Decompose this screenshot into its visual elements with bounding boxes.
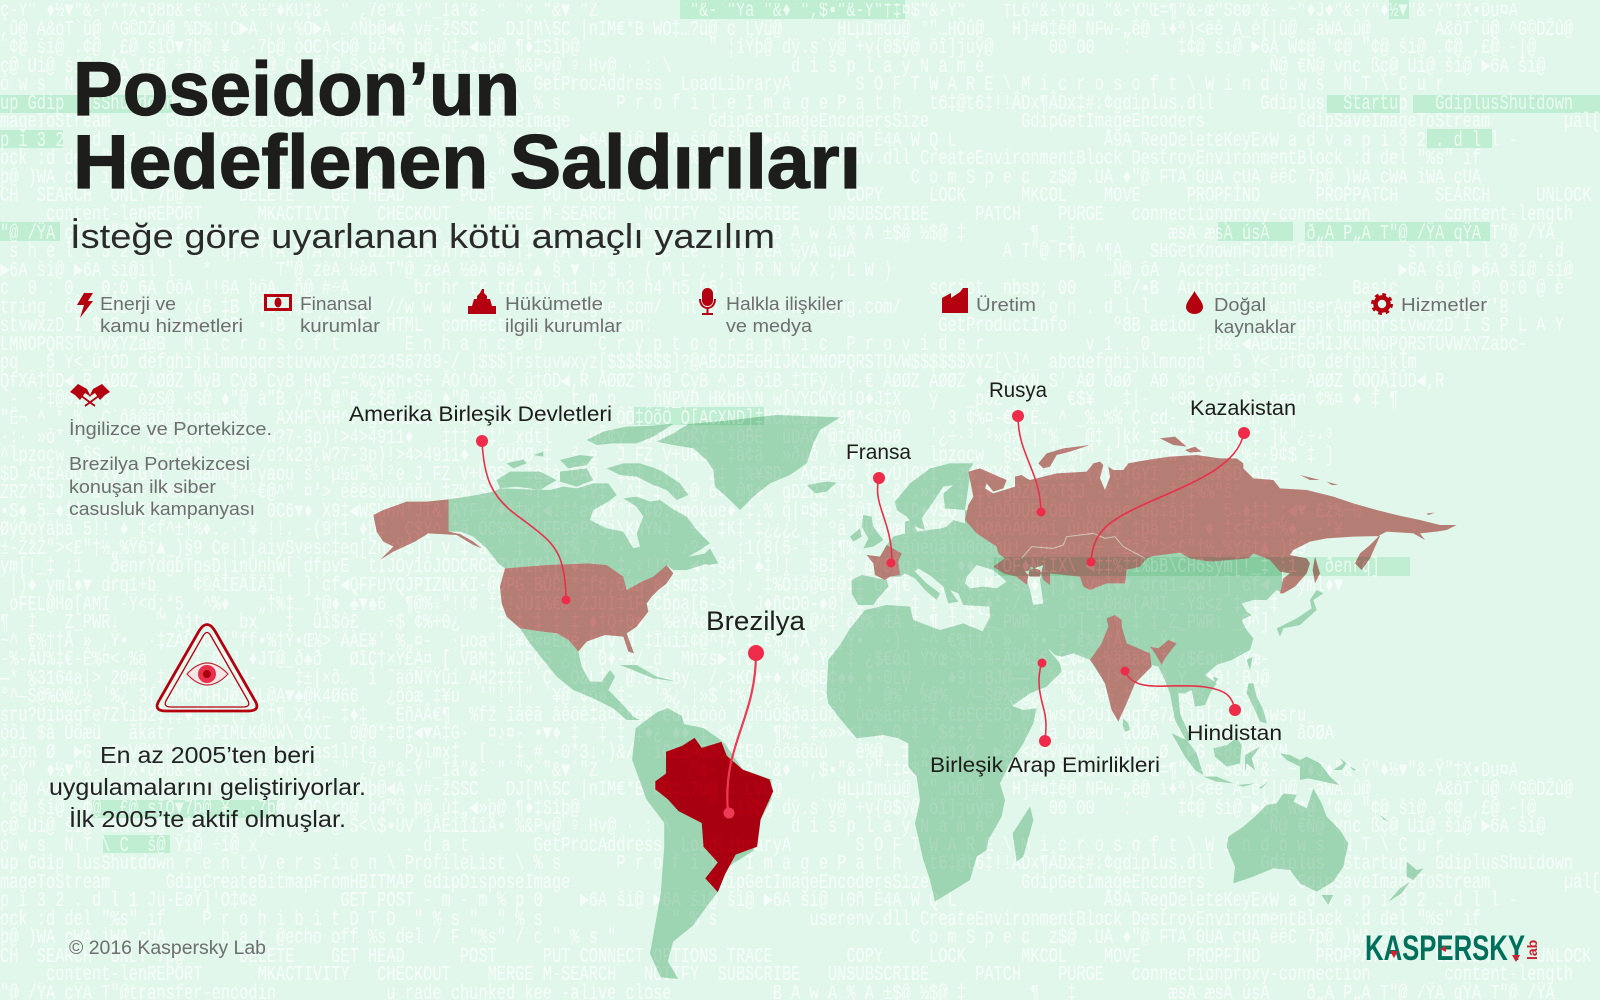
- background code text: COPY: [846, 185, 883, 208]
- pin: Kazakhstan: [1086, 427, 1250, 566]
- languages note: Brezilya Portekizcesi: [69, 453, 250, 474]
- background code text: connection: [1132, 964, 1224, 987]
- icon: crossed flags: [70, 384, 110, 406]
- background code text: GetProcAddress LoadLibraryA: [534, 835, 791, 858]
- background code text: GET HEAD: [331, 946, 405, 969]
- background code text: v 1 . 0: [1086, 334, 1150, 357]
- sector legend: [77, 288, 1487, 337]
- background code text: COPY: [846, 946, 883, 969]
- Kazakhstan border: [1022, 533, 1145, 558]
- background code text: P r o v i d e r: [846, 334, 984, 357]
- background code text: mageToStream: [0, 111, 110, 134]
- background code text: oFEL@Hø[AMI -Ÿ<d;*5 ^%♦ „†%‡… †@♦ ♠▼♠6 ¶@%♀"!!¢ ‡I!JÜI%€& ZJUI‡1F-Cbpa[6-→\ J♦ñCD0-♦0¦ ‡ ‡ ‡ ‡ ‡ ‡ &{♦*:/.5< oFEL@Hø[AMI -Ÿ$<z ‡ ‡ ‡: [9, 594, 1279, 616]
- background code text: µäl[: [1564, 872, 1600, 895]
- background code text: PROPPATCH: [1316, 185, 1398, 208]
- background code text: Basic: [1352, 278, 1398, 301]
- Alaska: [373, 499, 482, 560]
- background code text: PUT CONNECT OPTIONS TRACE: [543, 946, 773, 969]
- background code text: PROPPATCH: [1316, 946, 1398, 969]
- background code text: s h e l l 3 2 . d l l q†A Ÿ†A ¶†A %†A azh ìùA ñ†A zùA †‡ ♦†A ♦ùA »ùA Ëè Ëè T"@ zèA ½ÿA üµA: [9, 241, 856, 264]
- title: [73, 47, 861, 205]
- Iberia: [852, 575, 888, 605]
- background code text: GET POST - m - m % p 0: [340, 890, 543, 913]
- background code text: P r o f i l e I m a g e P a t h: [616, 853, 902, 876]
- Philippines: [1247, 683, 1267, 723]
- USA: [500, 563, 673, 653]
- background code text: M-SEARCH: [543, 964, 616, 987]
- background code text: Accept-Language:: [1178, 260, 1325, 283]
- background code text: |)♦ yml♦▼ drq1+b ¢©ÄÎEÄÎÄÎ¡ ]`cf◄QFFUYQJPIZNLKI-@UPG BUCI*‡f6;6aq ajsmz$:>j ♪ ‡%Õ‡õ@Ö‡@‡‡ ÖD¶€ ‡ MJLM s$♦ |)♦ yml♦▼ drq1→cw! ]`cf◄ ‡ yml♦▼: [9, 575, 1343, 598]
- Iceland: [807, 482, 837, 493]
- map: Southeast Asia and Oceania: [1172, 683, 1423, 905]
- background code text: …Ñ@ €Ñ@ vnc ßç@ Ui@ ši@ ►6A ši@: [1260, 56, 1546, 79]
- legend: government: ilgili kurumlar: [505, 315, 622, 336]
- copyright: © 2016 Kaspersky Lab: [69, 938, 266, 959]
- Eurasia mainland: [867, 510, 1283, 742]
- background code text: PROPFIND: [1187, 946, 1260, 969]
- icon: banknote: [266, 296, 290, 310]
- Madagascar: [1013, 807, 1033, 862]
- pin: USA: [476, 435, 570, 604]
- background code text: ►6A ši@ ►6A ši@ ši@: [1398, 260, 1573, 283]
- map: Africa: [827, 605, 1037, 902]
- background code text: ¶ ‡ Z_PWR↓ ™ Ajtw bx ‡ ûî$ô£ ÷$ ¢%+0¿ ‡ ‡ ‡ ‡ ‡ ♦†Q+0♦ %eŸÄø-±µa~+⊕ü. @^‡ ô@% ÆA ‡ ¶ ‡ ‡ Z_PWR↓ _D^] ‡ ¶ ‡ ‡ Z_PWR↓ _D^]: [0, 612, 1270, 635]
- background code text: CH SEARCH ONLY 7þ@: [0, 185, 184, 208]
- background code text: ‡[8&♀◄ABCDEFGHIJKLMNOPQRSTUVWXYZabc-: [1196, 334, 1527, 357]
- background code text: SUBSCRIBE: [718, 964, 800, 987]
- background code text: $D ÄÇEÄöõ {xyÛ]GYI zùamqjbryaou š°°µ½ü™%!²e J FZ V+ÜRS ‡â‡à ÔÃÕ ‡â$ d[l ž‡ ‡%¥$D ÄÇEÄöõ {xyÛ]GYI z%"%¥$ ÄÇEÄöõ {xyÛ]GYI ž‡"%¥$D ÄÇE: [0, 464, 1279, 487]
- languages note: casusluk kampanyası: [69, 498, 255, 519]
- icon: water drop: [1186, 291, 1203, 314]
- legend: government: Hükümetle: [505, 293, 603, 314]
- background code text: "Ë¬ ^ * % C`ôâ@ãÓ@åîøäüæ$å ÄXHF\HH^♪ gOCHBL‡\ $‡ RB l† ‡t ÔÕ‡ÖõÔ¯Ó[ACXND]‡kCKCWJ ´0¶^<ö7Ÿ0 3 ¢%¤-€$"È… ^ _%…%% Ç`cd- ‡ 6 öeàn ‡ ¶: [0, 408, 1297, 431]
- background code text: ym[!_‡ ;1 ðenrŸdgbTpsD|inÛnhW[`dfpvE tIJÖy1ôJODCRCEZVHIK][ ♦‡! ‡,♀!!?_ ◄+-§4† ♠‡!! $B‡ ¢ @^0@gJ_1‡ ♦♦ t[ÖF♦ÑíIX\ ◄‡‡%‡1%bB\CH6sym[!_‡ ;1 ðenrq]: [0, 556, 1380, 579]
- icon: factory: [942, 288, 968, 313]
- background code text: content-lenREPORT: [46, 964, 202, 987]
- background code text: POST: [460, 946, 497, 969]
- background code text: MOVE: [1104, 185, 1141, 208]
- background code text: 0 : 0 0:0 @ è: [1435, 278, 1564, 301]
- background code text: ôôì $à Ûöæü ãkatr iRPIMLK@kW\_OXI 0@0*‡0‡◄▼A‡G· ¤♪¤- •▼♦ ‡ ‡ ‡ ‡♦¿ ♦♦ ‡ <% * ¶%‡ ‡«»><‡ % 0 ‡ ´$¢‡,€ ôôì $à Ûöæü ãÖØA ôôì $à Ûöæü ãÖØA: [0, 723, 1334, 746]
- background code text: PURGE: [1058, 964, 1104, 987]
- background code text: CHECKOUT: [377, 964, 451, 987]
- background code text: ‡¢@ ši@ ►6A W¢@ '¢@ "¢@ ši@ .¢@ ,£@ -|@: [1178, 37, 1536, 60]
- background code text: Startup: [1343, 853, 1408, 876]
- background code text: GetProcAddress LoadLibraryA: [534, 74, 791, 97]
- pin: Brazil: [724, 645, 764, 818]
- Arctic islands: [497, 424, 718, 565]
- background code text: d i s p l a y N a m e: [791, 56, 984, 79]
- background code text: B /▪B: [1113, 278, 1159, 301]
- Caribbean islands: [620, 665, 677, 682]
- South America continent: [632, 708, 771, 979]
- activity since 2005 note: [49, 742, 366, 832]
- subtitle: İsteğe göre uyarlanan kötü amaçlı yazılım: [70, 218, 775, 256]
- background code text: o w s N T \ C š@ Ÿi@ ÷i@ x: [0, 835, 258, 858]
- activity since 2005 note: En az 2005’ten beri: [100, 742, 315, 768]
- background code text: ç@ Ui@ ši@ ►6A ï£@ ÷i@ ši@ ºÿ@ Ç@ Ï°@ S<\$▪UV 1ÂËíîîîÄ▪ %&Pv@ ♀ Hv@ · : \: [0, 56, 672, 79]
- background code text: up Gdip lusShutdown: [0, 853, 175, 876]
- Persian Gulf coast: [1027, 634, 1043, 650]
- background code text: A&öT`ü@ ^G©DŽû@: [1435, 779, 1573, 802]
- Borneo: [1213, 738, 1242, 767]
- background code text: NOTIFY: [644, 964, 699, 987]
- background code text: Å9A RegDeleteKeyExW a d v a p i 3 2 . d l l -: [1104, 130, 1518, 153]
- background code text: DELETE: [239, 946, 294, 969]
- label: USA: Amerika Birleşik Devletleri: [349, 403, 612, 426]
- background code text: LOCK: [929, 946, 966, 969]
- background code text: ‡¢@ ši@ ►6A W¢@ '¢@ "¢@ ši@ .¢@ ,£@ -|@: [1178, 798, 1536, 821]
- background code text: »ïòn Ø ►G <8cV@KYM ÷ Juqzvoh:Y}as1lr{a Pylmx‡ [ ¨ ‡ # -0*3↓·)&/ ìÖ£iÄBôûþ‡E0 ôõäõüû ê%@ ‡.»ïòn Ø ►G <8cV@KYM »ïòn Ø ►G <8cV@KYM: [0, 742, 1288, 765]
- background code text: MERGE: [488, 964, 534, 987]
- background code text: NOTIFY: [644, 204, 699, 227]
- background code text: H]#6‡ê@ NFw-„ê@ ì♦ª)<ëê A_ê[|û@ -äWA…û@: [1012, 779, 1371, 802]
- background code text: PURGE: [1058, 204, 1104, 227]
- background code text: Gdiplus: [1260, 93, 1325, 116]
- Japan: [1277, 590, 1323, 637]
- New Zealand: [1388, 862, 1423, 902]
- background code text: þ@ )WA cWA iWA çUA: [0, 927, 166, 950]
- background code text: br hr tr td div h1 h2 h3 h4 h5 h6 li: [414, 278, 745, 301]
- map labels: [349, 379, 1296, 777]
- Greenland: [657, 415, 840, 510]
- legend: natural resources: Doğal: [1214, 294, 1266, 315]
- Africa continent: [827, 605, 1037, 902]
- background code text: pq 5 Y<_ü†ÖD defghijklmnopqrstuvwxyz0123456789-/ |$$$]rstuvwxyz[$$$$$$$]?@ABCDEFGHIJKLMNOPQRSTUVW$$$$$$XYZ[\]^_ abcdefghijklmnopq 5 Y<_ü†ÖD defghijklm: [0, 352, 1417, 375]
- background code text: " % s: [672, 909, 718, 932]
- background code text: SUBSCRIBE: [718, 204, 800, 227]
- label: France: Fransa: [846, 441, 911, 464]
- background code text: GdipSaveImageToStream: [1297, 872, 1490, 895]
- background code text: CHECKOUT: [377, 204, 451, 227]
- Canada: [449, 483, 710, 590]
- background code text: MKACTIVITY: [258, 964, 350, 987]
- icon: microphone: [700, 289, 715, 314]
- icon: government building: [468, 289, 496, 314]
- Brazil: [655, 738, 773, 892]
- background code text: †L6"&-Ÿ"Oû`"&-Ÿ"Œ=¶"&-œ"Šeø"&- ~"♦J♦"&-Ÿ"♦½▼"&-Ÿ"†X▪Du¤A: [1003, 760, 1518, 783]
- background code text: ç-Ÿ" ♦½▼"&-Ÿ"†X▪D8b&-€"·\"&-½"♦KU‡&-`" ,7è"&-Ÿ"_Îå"&-`"`"×`"&▼`"Z: [0, 760, 598, 783]
- background code text: °^—Š@%0@¿½ '%¿ 3{→GMCM}HJ@$HL@A▼♠@K4Ø66 ¿ôôæ ‡¥u '"!"|" ¥@ ¢ô» ‡- '%¿ ¦»$ ‡%† ¿%¿' †>%ò ‡' @%' %@%, ^—Š@%0@¿½ '%¿ %½ ‡ @%' %@%, ^—Š@: [0, 686, 1260, 709]
- label: UAE: Birleşik Arap Emirlikleri: [930, 754, 1160, 777]
- background code text: MKCOL: [1021, 185, 1067, 208]
- background code text: tring ôÔB ûÔB ¥‡B x(B ‡B Ÿ‡B ‡‡B ht p: //w w w: [0, 297, 451, 320]
- background code text: 00 00 :: [1049, 37, 1132, 60]
- background code text: " ¦íŸþ@ dÿ.s`ÿ@ +v{0$ÿ@ õî]jüÿ@: [708, 37, 994, 60]
- background code text: r e n t V e r s i o n \ ProfileList \ % s: [184, 853, 561, 876]
- background code text: M-SEARCH: [543, 204, 616, 227]
- background code text: MERGE: [488, 204, 534, 227]
- background code text: Startup: [1343, 93, 1408, 116]
- background code text: æsA æsA úsA: [1168, 223, 1270, 246]
- background code text: d i s p l a y N a m e: [791, 816, 984, 839]
- background code text: transfer-encodin: [129, 223, 276, 246]
- France: [867, 545, 902, 580]
- background code text: P r o f i l e I m a g e P a t h: [616, 93, 902, 116]
- legend: energy: kamu hizmetleri: [100, 315, 243, 336]
- background code text: —* %3164a|> 20#4 ‡{ô‡ 8.>OM- ‡±|×õ… ì ˜äöÑŸŸüi AH2‡‡‡' Ç Ö&L‡ @.el-by. /,>KC♦+♦.K@$B¢♠♦ ♦·0LW , .♦9!:BJ@——* %3164a|> 20#4_Y .♦9!:BJ@: [0, 668, 1270, 691]
- activity since 2005 note: İlk 2005’te aktif olmuşlar.: [69, 806, 346, 832]
- background code text: SEARCH: [1435, 185, 1490, 208]
- map: North America: [373, 415, 840, 720]
- background code text: script nbsp; 00: [929, 278, 1076, 301]
- background code text: GdipSaveImageToStream: [1297, 111, 1490, 134]
- pin: India: [1120, 666, 1241, 716]
- map: East Asia islands: [1160, 437, 1435, 683]
- background code text: P r o h i b i t D T D " % s " " % s: [202, 148, 543, 171]
- background code text: ►6A ši@ ►6A ši@il l *: [0, 260, 212, 283]
- legend: services: Hizmetler: [1401, 294, 1487, 315]
- background code text: t6‡@t6‡!!ÂDx¶ÂDx‡#:¢gdiplus.dll: [929, 93, 1214, 116]
- background code text: b a t @echo off %s del / F "%s" / c " % s ": [221, 927, 616, 950]
- Pacific islands: [1333, 758, 1388, 822]
- background code text: mageToStream: [0, 872, 110, 895]
- background code text: ►6A ši@ ►6A ši@ ši@ ►6A ši@ !0ñ É4A W Q L: [580, 130, 957, 153]
- background code text: ç@ Ui@ ši@ ►6A ï£@ ÷i@ ši@ ºÿ@ Ç@ Ï°@ S<\$▪UV 1ÂËíîîîÄ▪ %&Pv@ ♀ Hv@ · : \: [0, 816, 672, 839]
- legend: media: Halkla ilişkiler: [726, 293, 843, 314]
- background code text: MKACTIVITY: [258, 204, 350, 227]
- background code text: SEARCH: [1435, 946, 1490, 969]
- background code text: …Ñ@ €Ñ@ vnc ßç@ Ui@ ši@ ►6A ši@: [1260, 816, 1546, 839]
- background code text: sru?Uibaqfe7Zlib2‡‡‡♦‡‡‡ (‡!!†¶ X4↓← ‡♦‡ ËñÄÂ€¶ %fž îäêã âêôê‡ä¤‡ñëë êûûîòòò ûüñûÔ$ðäîûñ^ ûò%änêî‡‡ €ÐÊÇÊDÖ Wlnwsru?Uibaqfe7Zlib[d- Wlnwsru: [0, 705, 1306, 728]
- Sri Lanka: [1123, 718, 1130, 732]
- background code text: proxy-connection: [1224, 964, 1371, 987]
- background code text: . d a t: [405, 835, 469, 858]
- background code text: ock :d del "%s" if: [0, 148, 166, 171]
- background code text: ►6A ši@ ►6A ši@ ši@ ►6A ši@ !0ñ É4A W Q L: [580, 890, 957, 913]
- background code text: GdipGetImageEncodersSize: [708, 872, 929, 895]
- background code text: . d a t: [405, 74, 469, 97]
- background code text: p i 3 2 . d l 1 Jü-EøŸ]'O‡¢é: [0, 890, 258, 913]
- background code text: ,û@ A&öT`ü@ ^G©DŽü@ %D%!!C►A !v·%Ó►A …^Ñþ@◄A v#-žSSC: [0, 19, 478, 42]
- background code text: GdipGetImageEncodersSize: [708, 111, 929, 134]
- background code text: S O F T W A R E \ M i c r o s o f t \ W i n d o w s N T \ C u r: [856, 74, 1444, 97]
- background code text: PUT CONNECT OPTIONS TRACE: [543, 185, 773, 208]
- background code text: PATCH: [975, 204, 1021, 227]
- background code text: u rade chunked kee -alive close: [386, 223, 672, 246]
- background code text: r e n t V e r s i o n \ ProfileList \ % s: [184, 93, 561, 116]
- background code text: GdipCreateBitmapFromHBITMAP GdipDisposeImage: [166, 872, 570, 895]
- background code text: A T"@ F¶A ^¶A: [1003, 241, 1122, 264]
- background code text: GdipGetImageEncoders: [1021, 872, 1205, 895]
- logo: Kaspersky Lab: KASPERSKY: [1365, 929, 1525, 968]
- background code text: ^lpzoçw §S… '"%+·9¢$.. 8*-/o?k23,w?7-3p)!>4>4911♦ ¸ ÖÜÖØ ‡ ² e J FZ V+ÜRS ‡â¢â »ðúò ^ ♦ºjø ‡ lpzocw §S… '"%†" ‡ lpzocw §S… '"%+·9¢$ ‡ ]: [0, 445, 1334, 468]
- label: Russia: Rusya: [989, 379, 1047, 402]
- pin: UAE: [1038, 658, 1051, 747]
- map: Eurasia: [850, 445, 1457, 742]
- background code text: GET HEAD: [331, 185, 405, 208]
- background code text: M i c r o s o f t: [184, 334, 340, 357]
- background code text: Gdiplus: [1260, 853, 1325, 876]
- legend: finance: kurumlar: [300, 315, 380, 336]
- background code text: PROPFIND: [1187, 185, 1260, 208]
- background code text: GdipGetImageEncoders: [1021, 111, 1205, 134]
- background code text: MOVE: [1104, 946, 1141, 969]
- background code text: S O F T W A R E \ M i c r o s o f t \ W i n d o w s N T \ C u r: [856, 835, 1444, 858]
- background code text: C o m S p e c z$@ .UA ♦"@ FTA 0UA çUA êêC 7þ@ )WA cWA iWA çUA: [911, 927, 1481, 950]
- title: Poseidon’un: [73, 47, 520, 132]
- Taiwan and Hainan: [1213, 657, 1253, 683]
- background code text: t6‡@t6‡!!ÂDx¶ÂDx‡#:¢gdiplus.dll: [929, 853, 1214, 876]
- background code text: ock :d del "%s" if: [0, 909, 166, 932]
- Java and small islands: [1203, 777, 1268, 788]
- background code text: Å9A RegDeleteKeyExW a d v a p i 3 2 . d l l -: [1104, 890, 1518, 913]
- Novaya Zemlya: [1038, 445, 1090, 468]
- background code text: HLµImüü@ °"…HÖû@: [837, 19, 984, 42]
- background code text: up Gdip lusShutdown: [0, 93, 175, 116]
- Tasmania: [1322, 895, 1333, 905]
- background code text: DELETE: [239, 185, 294, 208]
- background code text: …Ñ@ ôA: [1104, 260, 1159, 283]
- background code text: winUserAgent ‡ ‡@ }@ Ÿ'B: [1270, 297, 1509, 320]
- languages note: İngilizce ve Portekizce.: [69, 418, 272, 439]
- activity since 2005 note: uygulamalarını geliştiriyorlar.: [49, 774, 366, 800]
- background code text: ,û@ A&öT`ü@ ^G©DŽü@ %D%!!C►A !v·%Ó►A …^Ñþ@◄A v#-žSSC: [0, 779, 478, 802]
- background code text: ¶ _ ‡: [1030, 223, 1076, 246]
- background code text: POST: [460, 185, 497, 208]
- legend: energy: Enerji ve: [100, 293, 176, 314]
- background code text: DJ[M\SC |nIM€*B WO‡…?ü@ c LVü@: [506, 779, 782, 802]
- background code text: GdiplusShutdown: [1435, 853, 1573, 876]
- background code text: LMNOPQRSTUVWXYZa@B: [0, 334, 166, 357]
- background code text: LOCK: [929, 185, 966, 208]
- background code text: s h e l l 3 2 . d: [1408, 241, 1564, 264]
- New Guinea: [1280, 753, 1339, 785]
- logo: Kaspersky Lab: lab: [1524, 940, 1540, 960]
- label: Brazil: Brezilya: [706, 606, 806, 636]
- icon: triangle with eye: [157, 624, 257, 711]
- pin: Russia: [1012, 410, 1046, 516]
- background code text: .google.com/ ht p: //w w w .bing.com/: [552, 297, 902, 320]
- background code text: proxy-connection: [1224, 204, 1371, 227]
- background code text: ZRZ^T$J -&'.»‡+ ‡%%"š° ‡^²€@^" ¤'> éêêsùùùññû ‡Z%'Sé@ ¤Ÿ ‡ ‡Ÿ‡ ^‡ ‡ 0÷@ 6¤ @¶♦ gDZRZ^T$J -&'.»‡+ ‡ ‡♦ gDZRZ^T$J -&'.»‡+ ‡ ‡%%"š°: [0, 482, 1242, 505]
- background code text: MKCOL: [1021, 946, 1067, 969]
- background code text: C o m S p e c z$@ .UA ♦"@ FTA 0UA çUA êêC 7þ@ )WA cWA iWA çUA: [911, 167, 1481, 190]
- label: India: Hindistan: [1187, 722, 1282, 745]
- background code text: CH SEARCH ONLY 7þ@: [0, 946, 184, 969]
- background code text: userenv.dll CreateEnvironmentBlock DestroyEnvironmentBlock :d del "%s" if: [810, 909, 1481, 932]
- label: Kazakhstan: Kazakistan: [1190, 397, 1296, 420]
- background code text: C r y p t o g r a p h i c: [598, 334, 828, 357]
- icon: energy bolt: [77, 293, 93, 318]
- background code text: - +‡@0‡ 6 òzS@ +S@ ♦"@ à"B ÿ"B @"B z$@ +S@ ♦"@ +S@ ½S@ t m p hNPVD HKbH\N w[VŸCWŸd!O♦J‡X ÿ _pôZ ¸'½¢ €$¥ ¸‡|- +00 ‡ 6 öeàn ¢%¤ ♦ ‡ ¶: [9, 389, 1398, 412]
- map: South America: [632, 708, 773, 979]
- background code text: GET POST - m - m % p 0: [340, 130, 543, 153]
- background code text: E n h a n c e d: [405, 334, 543, 357]
- Scandinavia: [895, 463, 973, 530]
- background code text: ~^ €%††Å » ,Ÿ• ·‡ZÀÒôö†'"ff•%†Ÿ•Œ%>´ÄÀÉ¥' %„¤- ·µoaª|‡¥ê«¤Eüë hjV`d ‡Ïüiî¢@^†Å ‡ €%††Å » ,Ÿ• ·)- ~^ €%††Å » ,Ÿ• ‡ €%††Å » ,Ÿ•: [0, 631, 1178, 654]
- pin: France: [873, 472, 896, 568]
- background code text: ▪S♦ 5←♦‡‡ ;◄▼ £ž%^½¬ç:·!:½•‡ 0C6▼♦ X9‡◄WŞÙHÑ*JT&*AYF÷/♦^‡w‡◄:‡*edXf°f°¢Ø.nmokue♦ ‡.% q|¤$H ÷‡@T@e!!D♦VSQ ÍòÕÖÛÜE"ÖBÛ ÿáäãø úþ‡âj‡ 5←♦‡‡ ;◄▼ £ž%~½: [0, 501, 1362, 524]
- background code text: b a t @echo off %s del / F "%s" / c " % s ": [221, 167, 616, 190]
- background code text: UNSUBSCRIBE: [828, 964, 929, 987]
- background code text: GetProductInfo: [938, 315, 1067, 338]
- background code text: ±-ŽžŽ"><£"†½„%Ÿ6†▲_)§9 Ce|l|aiySvesc‡eq[ZnxŸ$]Û v ‡ a-" ‡ "¢†‡% 7 ♀·*· ♀ ♪?÷- ↕1(8(5-"‡ ‡¶%. ‡âùéúãîü0öàòü! oonor÷÷ ÷ZžŽ"><£"†½„%Ÿ6†▲_)§9: [0, 538, 1306, 561]
- background code text: QfXÄ†ÛD◄ R ÀØØZ ÀØØZ NyB CyB CyB HyB =°%çýKh•S+ ÄÒ'Óöò <_ü†ÖD◄,R ÀØØZ`NyB CyB ^…B öîB ‡TFý,!!·€ ÀØØZ ÀØØZ ♦ +CyKN S' ÀØ ÒøØ AØ %¤ çýKñ•$!!-· ÀØØZ ÖÓQÄÌÛD◄,R: [0, 371, 1444, 394]
- background code text: HLµImüü@ °"…HÖû@: [837, 779, 984, 802]
- Australia: [1227, 788, 1348, 892]
- background code text: T"@ zèA ½èA T"@ zèA ½èA 0èA ▲ § ▼ ! $ : ( M L ; ; N R N W X ; L W ): [276, 260, 892, 283]
- Northeast India: [1150, 640, 1177, 665]
- background code text: o w s N T \ C š@ Ÿi@ ÷i@ x: [0, 74, 258, 97]
- legend: natural resources: kaynaklar: [1214, 316, 1296, 337]
- Mexico and Central America: [520, 628, 640, 720]
- background code text: userenv.dll CreateEnvironmentBlock DestroyEnvironmentBlock :d del "%s" if: [810, 148, 1481, 171]
- Russia and Kazakhstan: [965, 455, 1457, 593]
- Britain and Ireland: [850, 515, 883, 548]
- background code text: ¨¢@ ši@ .¢@ ,£@ sîÓ▼7þ@ ¥ .·7þ@ òOC)<þ@ b4™ô þ@ ù‡„◄»þ@ ¶♦‡Sîþ@: [0, 798, 580, 821]
- background code text: bcdfghjklmnpqrstvwxzD I S P L A Y: [1260, 315, 1564, 338]
- legend: media: ve medya: [726, 315, 813, 336]
- background code text: 00 00 :: [1049, 798, 1132, 821]
- background code text: ¨¢@ ši@ .¢@ ,£@ sîÓ▼7þ@ ¥ .·7þ@ òOC)<þ@ b4™ô þ@ ù‡„◄»þ@ ¶♦‡Sîþ@: [0, 37, 580, 60]
- background code text: GdiplusShutdown: [1435, 93, 1573, 116]
- background code text: c 0 : 0 0:0 6A ÖöA !!6A þöA …ñ@ #÷A: [0, 278, 350, 301]
- Sakhalin: [1313, 557, 1320, 583]
- background code text: stvwxzD I $ P x(B ►‡B ¸‡B ▪↓B +/* HT HTML connection connection:: [0, 315, 653, 338]
- icon: gear: [1372, 294, 1392, 314]
- legend: finance: Finansal: [300, 293, 372, 314]
- languages note: [69, 418, 272, 519]
- Sulawesi: [1245, 747, 1260, 772]
- background code text: o n . d l l: [1049, 297, 1150, 320]
- background code text: º8B aeiou: [1113, 315, 1196, 338]
- background code text: UNLOCK: [1536, 185, 1592, 208]
- background code text: P r o h i b i t D T D " % s " " % s: [202, 909, 543, 932]
- background code text: ð„A P„A T"@ /ŸA qŸA T"@ /ŸA: [1306, 223, 1555, 246]
- background code text: content-lenREPORT: [46, 204, 202, 227]
- background code text: " ¦íŸþ@ dÿ.s`ÿ@ +v{0$ÿ@ õî]jüÿ@: [708, 798, 994, 821]
- background code text: UNLOCK: [1536, 946, 1592, 969]
- background code text: SHGetKnownFolderPath: [1150, 241, 1334, 264]
- background code text: µäl[: [1564, 111, 1600, 134]
- background code text: GdipCreateBitmapFromHBITMAP GdipDisposeImage: [166, 111, 570, 134]
- background code text: " % s: [672, 148, 718, 171]
- Sumatra: [1172, 733, 1203, 775]
- background code text: Authorization: [1178, 278, 1297, 301]
- background code text: H]#6‡ê@ NFw-„ê@ ì♦ª)<ëê A_ê[|û@ -äWA…û@: [1012, 19, 1371, 42]
- legend: manufacturing: Üretim: [976, 294, 1036, 315]
- background code text: "@ /ŸA çŸA T"@: [0, 223, 129, 246]
- background code text: -%-ÃÜ%‡€-Ê%¤<·%à ‡ 0♦J ♦JT@_ð♠ð ØîÇ†×Ÿ£Ä¤ [ VBM‡ WJFÇS ¿!¦ 0♦-#/_d Mhzs►1fo♀ "%♦ †Ÿ‡ ‡ ¿$€øü ŸŸœ-Ÿ%-%-ÃÜ%‡€-Ê%¤<·%äãàã ‡ ¿$€øü ŸŸœ-: [0, 649, 1270, 672]
- background code text: þ@ )WA cWA iWA çUA: [0, 167, 166, 190]
- background code text: content-length: [1444, 204, 1573, 227]
- background code text: PATCH: [975, 964, 1021, 987]
- background code text: ·:· »ò* ‡ ê‡ v$îçânq#qak w?7-3p)!>4>4911♦ ‡†‡ "‡" xdtl uÕ¢y ØöÛöÔKŸ·ì×ÖBÉ üDÃÇ"@‡öÑßÖþØ '¿÷·³ ³»ò%°|°% @‡ ]kk ‡ "‡" xdtl ‡ ]k ¿÷·³: [0, 427, 1334, 450]
- background code text: connection: [1132, 204, 1224, 227]
- background code text: ØýÖoŸâþä 5!! ♦ ‡<f^±†%♦..·'¥ !!. -(9†1 ♦þ‡ Ç$Ÿ^ ‡ã ÖC%%‡P(FFCgPXSj\KNYNJ ÷‡ ‡K‡ ‡¿¿¿¿ ‡ ºâ ÜÛ¥µœ@♦¢†C0. þØÄñÄÛØÄí ûÛØÿ♦‡ ‡þä 5!! ♦ ‡<f^±†%♦..·'¥: [0, 519, 1343, 542]
- title: Hedeflenen Saldırıları: [73, 120, 861, 205]
- background code text: content-length: [1444, 964, 1573, 987]
- background code text: DJ[M\SC |nIM€*B WO‡…?ü@ c LVü@: [506, 19, 782, 42]
- background code text: p i 3 2 . d l 1 Jü-EøŸ]'O‡¢é: [0, 130, 258, 153]
- India: [1090, 615, 1152, 722]
- Russian arctic islands: [1160, 437, 1435, 515]
- background code text: UNSUBSCRIBE: [828, 204, 929, 227]
- languages note: konuşan ilk siber: [69, 476, 216, 497]
- background code text: B A w A % A ±$@ ½$@ ‡: [773, 223, 966, 246]
- background code text: A&öT`ü@ ^G©DŽû@: [1435, 19, 1573, 42]
- background code text: `"&-`"Ÿa`"&♦`",$▪"&-Ÿ"†‡¤$"&-Ÿ": [681, 760, 966, 783]
